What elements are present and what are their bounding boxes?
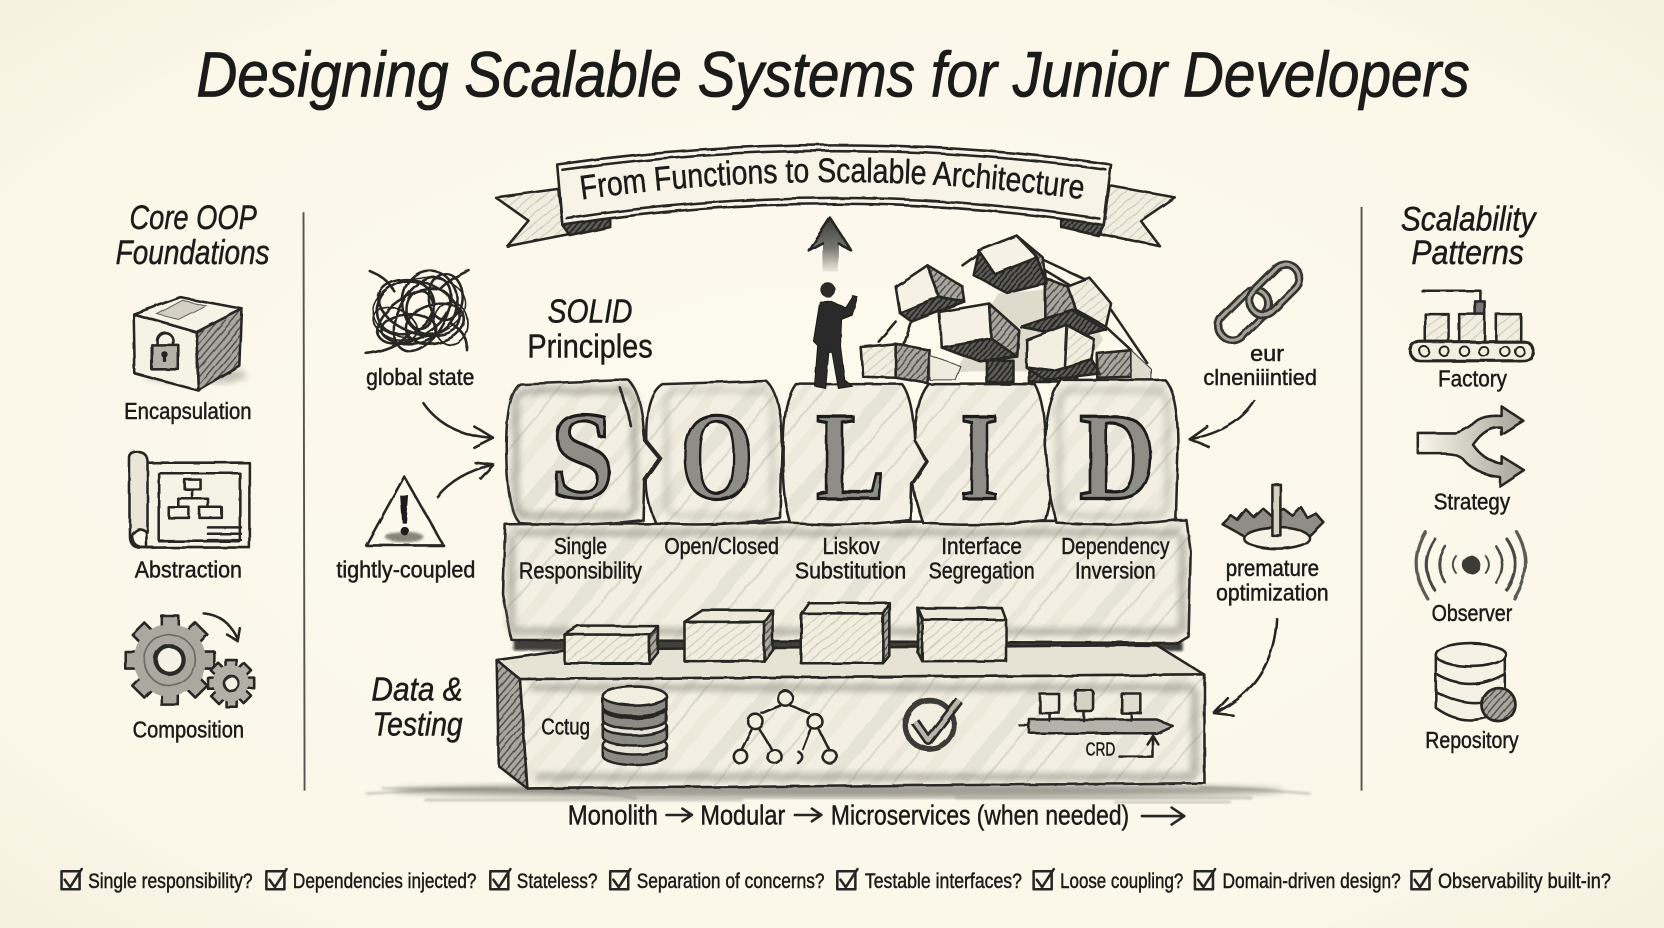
- label: interface segregation: Segregation: [929, 557, 1035, 583]
- item: loose coupling: [1034, 869, 1183, 893]
- panel: anti-patterns right: [1190, 259, 1329, 715]
- heading: data and testing: Testing: [372, 705, 463, 742]
- icon: gears: [125, 613, 255, 707]
- item: separation of concerns: Separation of concerns?: [637, 870, 825, 893]
- figure looking up: [814, 282, 857, 388]
- checklist: [62, 869, 1611, 893]
- label: interface segregation: Interface: [941, 533, 1022, 559]
- box 3: [801, 603, 889, 663]
- arrows: flow connectors: [666, 808, 1184, 825]
- label: single responsibility: Single: [554, 533, 607, 559]
- item: loose coupling: Loose coupling?: [1060, 870, 1183, 893]
- block D: [1045, 380, 1178, 527]
- label: premature optimization: [1216, 555, 1329, 606]
- middle slab: [503, 520, 1191, 651]
- label: open/closed: Open/Closed: [664, 533, 779, 559]
- heading: SOLID principles: SOLID: [548, 293, 632, 330]
- box 1: [565, 626, 658, 663]
- label: cctug: Cctug: [541, 713, 590, 739]
- label: premature optimization: premature: [1226, 555, 1319, 581]
- icon: repository database: [1436, 643, 1515, 722]
- flow: monolith to microservices: Microservices (when needed): [831, 800, 1129, 831]
- label: abstraction: Abstraction: [135, 556, 242, 582]
- block S: [506, 380, 659, 526]
- flow: monolith to microservices: Modular: [700, 800, 785, 831]
- heading: SOLID principles: [527, 293, 653, 365]
- block I: I: [960, 388, 999, 527]
- cube: top: [973, 236, 1046, 293]
- arrow: premature optimization to base: [1214, 619, 1277, 715]
- label: liskov substitution: Liskov: [822, 533, 880, 559]
- connector boxes: [565, 603, 1006, 663]
- arrow: global state to SOLID: [423, 403, 493, 448]
- icon: global state tangle: [366, 268, 470, 361]
- label: global state: global state: [366, 364, 474, 390]
- label: single responsibility: Responsibility: [519, 557, 642, 583]
- icon: chain links: [1213, 259, 1305, 346]
- item: dependencies injected: [266, 869, 477, 893]
- item: dependencies injected: Dependencies injected?: [293, 870, 477, 893]
- title: Designing Scalable Systems for Junior Developers: [196, 40, 1470, 111]
- arrow: coupling to SOLID: [1190, 401, 1254, 447]
- item: observability built-in: Observability built-in?: [1438, 870, 1611, 893]
- label: dependency inversion: Inversion: [1075, 557, 1156, 583]
- base slab: [497, 645, 1204, 788]
- label: repository: Repository: [1425, 727, 1519, 753]
- heading: data and testing: [371, 670, 463, 742]
- label: garbled term: clneniiintied: [1203, 365, 1317, 390]
- item: testable interfaces: [837, 869, 1022, 893]
- label: dependency inversion: [1061, 533, 1170, 583]
- block L: L: [816, 388, 885, 527]
- block I: [913, 384, 1058, 527]
- icon: check circle: [905, 700, 959, 749]
- icon: tree diagram: [734, 691, 837, 764]
- item: domain-driven design: [1195, 869, 1401, 893]
- flow: monolith to microservices: [568, 800, 1184, 831]
- label: composition: Composition: [133, 717, 244, 743]
- divider: right: [1361, 207, 1363, 791]
- label: single responsibility: [519, 533, 642, 583]
- label: premature optimization: optimization: [1216, 580, 1329, 606]
- heading: scalability patterns: [1401, 200, 1537, 272]
- divider: left: [304, 212, 305, 791]
- label: garbled term: eur: [1250, 341, 1285, 366]
- heading: core OOP foundations: Core OOP: [129, 199, 257, 237]
- icon: strategy fork arrows: [1418, 406, 1524, 486]
- label: liskov substitution: Substitution: [795, 557, 906, 583]
- panel: core OOP foundations: [116, 199, 270, 743]
- heading: core OOP foundations: [116, 199, 270, 272]
- heading: SOLID principles: Principles: [527, 328, 653, 365]
- label: encapsulation: Encapsulation: [124, 398, 252, 424]
- arrow: tightly-coupled to SOLID: [437, 463, 493, 497]
- SOLID stone blocks: [506, 380, 1178, 527]
- heading: data and testing: Data &: [371, 670, 463, 707]
- label: tightly-coupled: tightly-coupled: [336, 556, 475, 582]
- icon: pipeline: [1019, 690, 1173, 757]
- item: stateless: Stateless?: [517, 870, 598, 893]
- item: domain-driven design: Domain-driven design?: [1223, 870, 1401, 893]
- label: factory: Factory: [1438, 365, 1507, 391]
- block S: S: [551, 387, 614, 526]
- item: testable interfaces: Testable interfaces?: [865, 870, 1022, 893]
- arrow: up: [809, 218, 851, 272]
- banner ribbon: [496, 145, 1175, 246]
- pile of tangled cubes: [861, 236, 1151, 383]
- label: observer: Observer: [1432, 600, 1512, 626]
- item: single responsibility: Single responsibility?: [88, 870, 253, 893]
- block L: [783, 384, 926, 527]
- label: strategy: Strategy: [1434, 488, 1510, 514]
- cube: lower left: [861, 344, 960, 383]
- SOLID principle labels: [519, 533, 1170, 583]
- cube: right center: [1026, 325, 1099, 380]
- item: stateless: [490, 869, 598, 893]
- cube: left: [896, 265, 965, 322]
- box 2: [684, 610, 773, 661]
- label: liskov substitution: [795, 533, 906, 583]
- cube: small right: [1097, 350, 1151, 380]
- label: CRD: CRD: [1086, 740, 1115, 760]
- block O: O: [680, 388, 753, 527]
- panel: scalability patterns: [1401, 200, 1537, 753]
- banner: [494, 142, 1176, 248]
- base slab contents: [541, 687, 1173, 765]
- heading: scalability patterns: Patterns: [1411, 234, 1524, 272]
- cube: center: [939, 303, 1019, 362]
- panel: anti-patterns left: [336, 268, 653, 742]
- icon: factory conveyor: [1410, 291, 1533, 361]
- icon: observer signal: [1416, 532, 1526, 599]
- ground shadow: [366, 783, 1311, 802]
- cube: right upper: [1021, 278, 1111, 337]
- label: interface segregation: [929, 533, 1035, 583]
- block O: [646, 381, 782, 527]
- box 4: [918, 608, 1006, 661]
- icon: database stack: [603, 687, 666, 765]
- icon: warning triangle: [366, 476, 444, 545]
- label: dependency inversion: Dependency: [1061, 533, 1170, 559]
- block D: D: [1079, 388, 1156, 527]
- icon: blueprint scroll: [129, 452, 249, 548]
- heading: scalability patterns: Scalability: [1401, 200, 1537, 238]
- flow: monolith to microservices: Monolith: [568, 800, 658, 831]
- icon: bear trap: [1223, 485, 1323, 549]
- icon: locked box: [134, 297, 247, 391]
- SOLID stack: [366, 236, 1311, 802]
- label: garbled term: [1203, 341, 1317, 390]
- heading: core OOP foundations: Foundations: [116, 234, 270, 272]
- banner text: From Functions to Scalable Architecture: [580, 158, 1084, 200]
